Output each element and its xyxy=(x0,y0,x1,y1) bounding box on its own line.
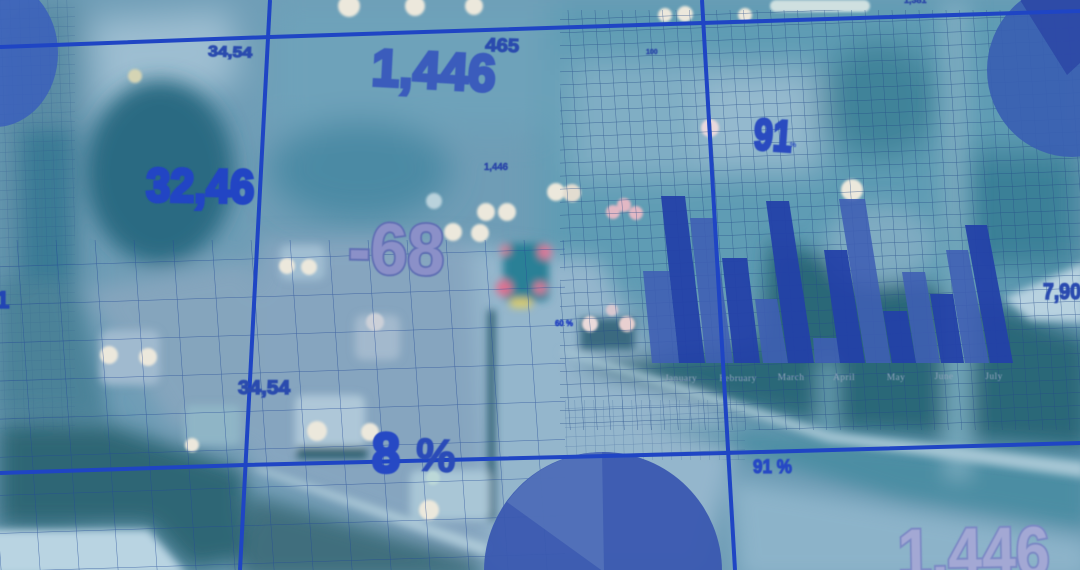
number: 1,446 small: 1,446 xyxy=(484,161,508,173)
month labels xyxy=(665,372,1003,384)
month labels: May xyxy=(887,373,905,383)
pie chart: top right xyxy=(980,0,1080,160)
number: -68: -68 xyxy=(348,209,445,291)
pie chart: top left xyxy=(0,0,58,127)
pie chart: bottom center xyxy=(484,452,722,570)
percent sign beside 8: % xyxy=(414,428,457,482)
number: 32,46: 32,46 xyxy=(146,158,255,213)
number: 91: 91 xyxy=(752,110,794,162)
number: 34,54 lower: 34,54 xyxy=(238,378,290,399)
number: 465: 465 xyxy=(485,35,520,57)
number: 1,446 large: 1,446 xyxy=(370,39,497,103)
number: 8 %: 8 xyxy=(372,421,400,484)
number: 34,54 top: 34,54 xyxy=(208,43,253,62)
bars: dark series xyxy=(661,196,1013,363)
bars: light series xyxy=(643,199,989,363)
month labels: January xyxy=(665,374,697,384)
bar chart: monthly values xyxy=(643,196,1013,384)
month labels: July xyxy=(985,372,1003,382)
number: 91 % lower: 91 % xyxy=(753,457,792,478)
number: 100: 100 xyxy=(646,49,658,56)
month labels: April xyxy=(833,373,855,383)
month labels: June xyxy=(934,372,954,382)
number: small percent: % xyxy=(790,142,797,149)
month labels: March xyxy=(778,373,804,383)
number: 60 % small: 60 % xyxy=(555,318,573,328)
month labels: February xyxy=(719,374,757,384)
